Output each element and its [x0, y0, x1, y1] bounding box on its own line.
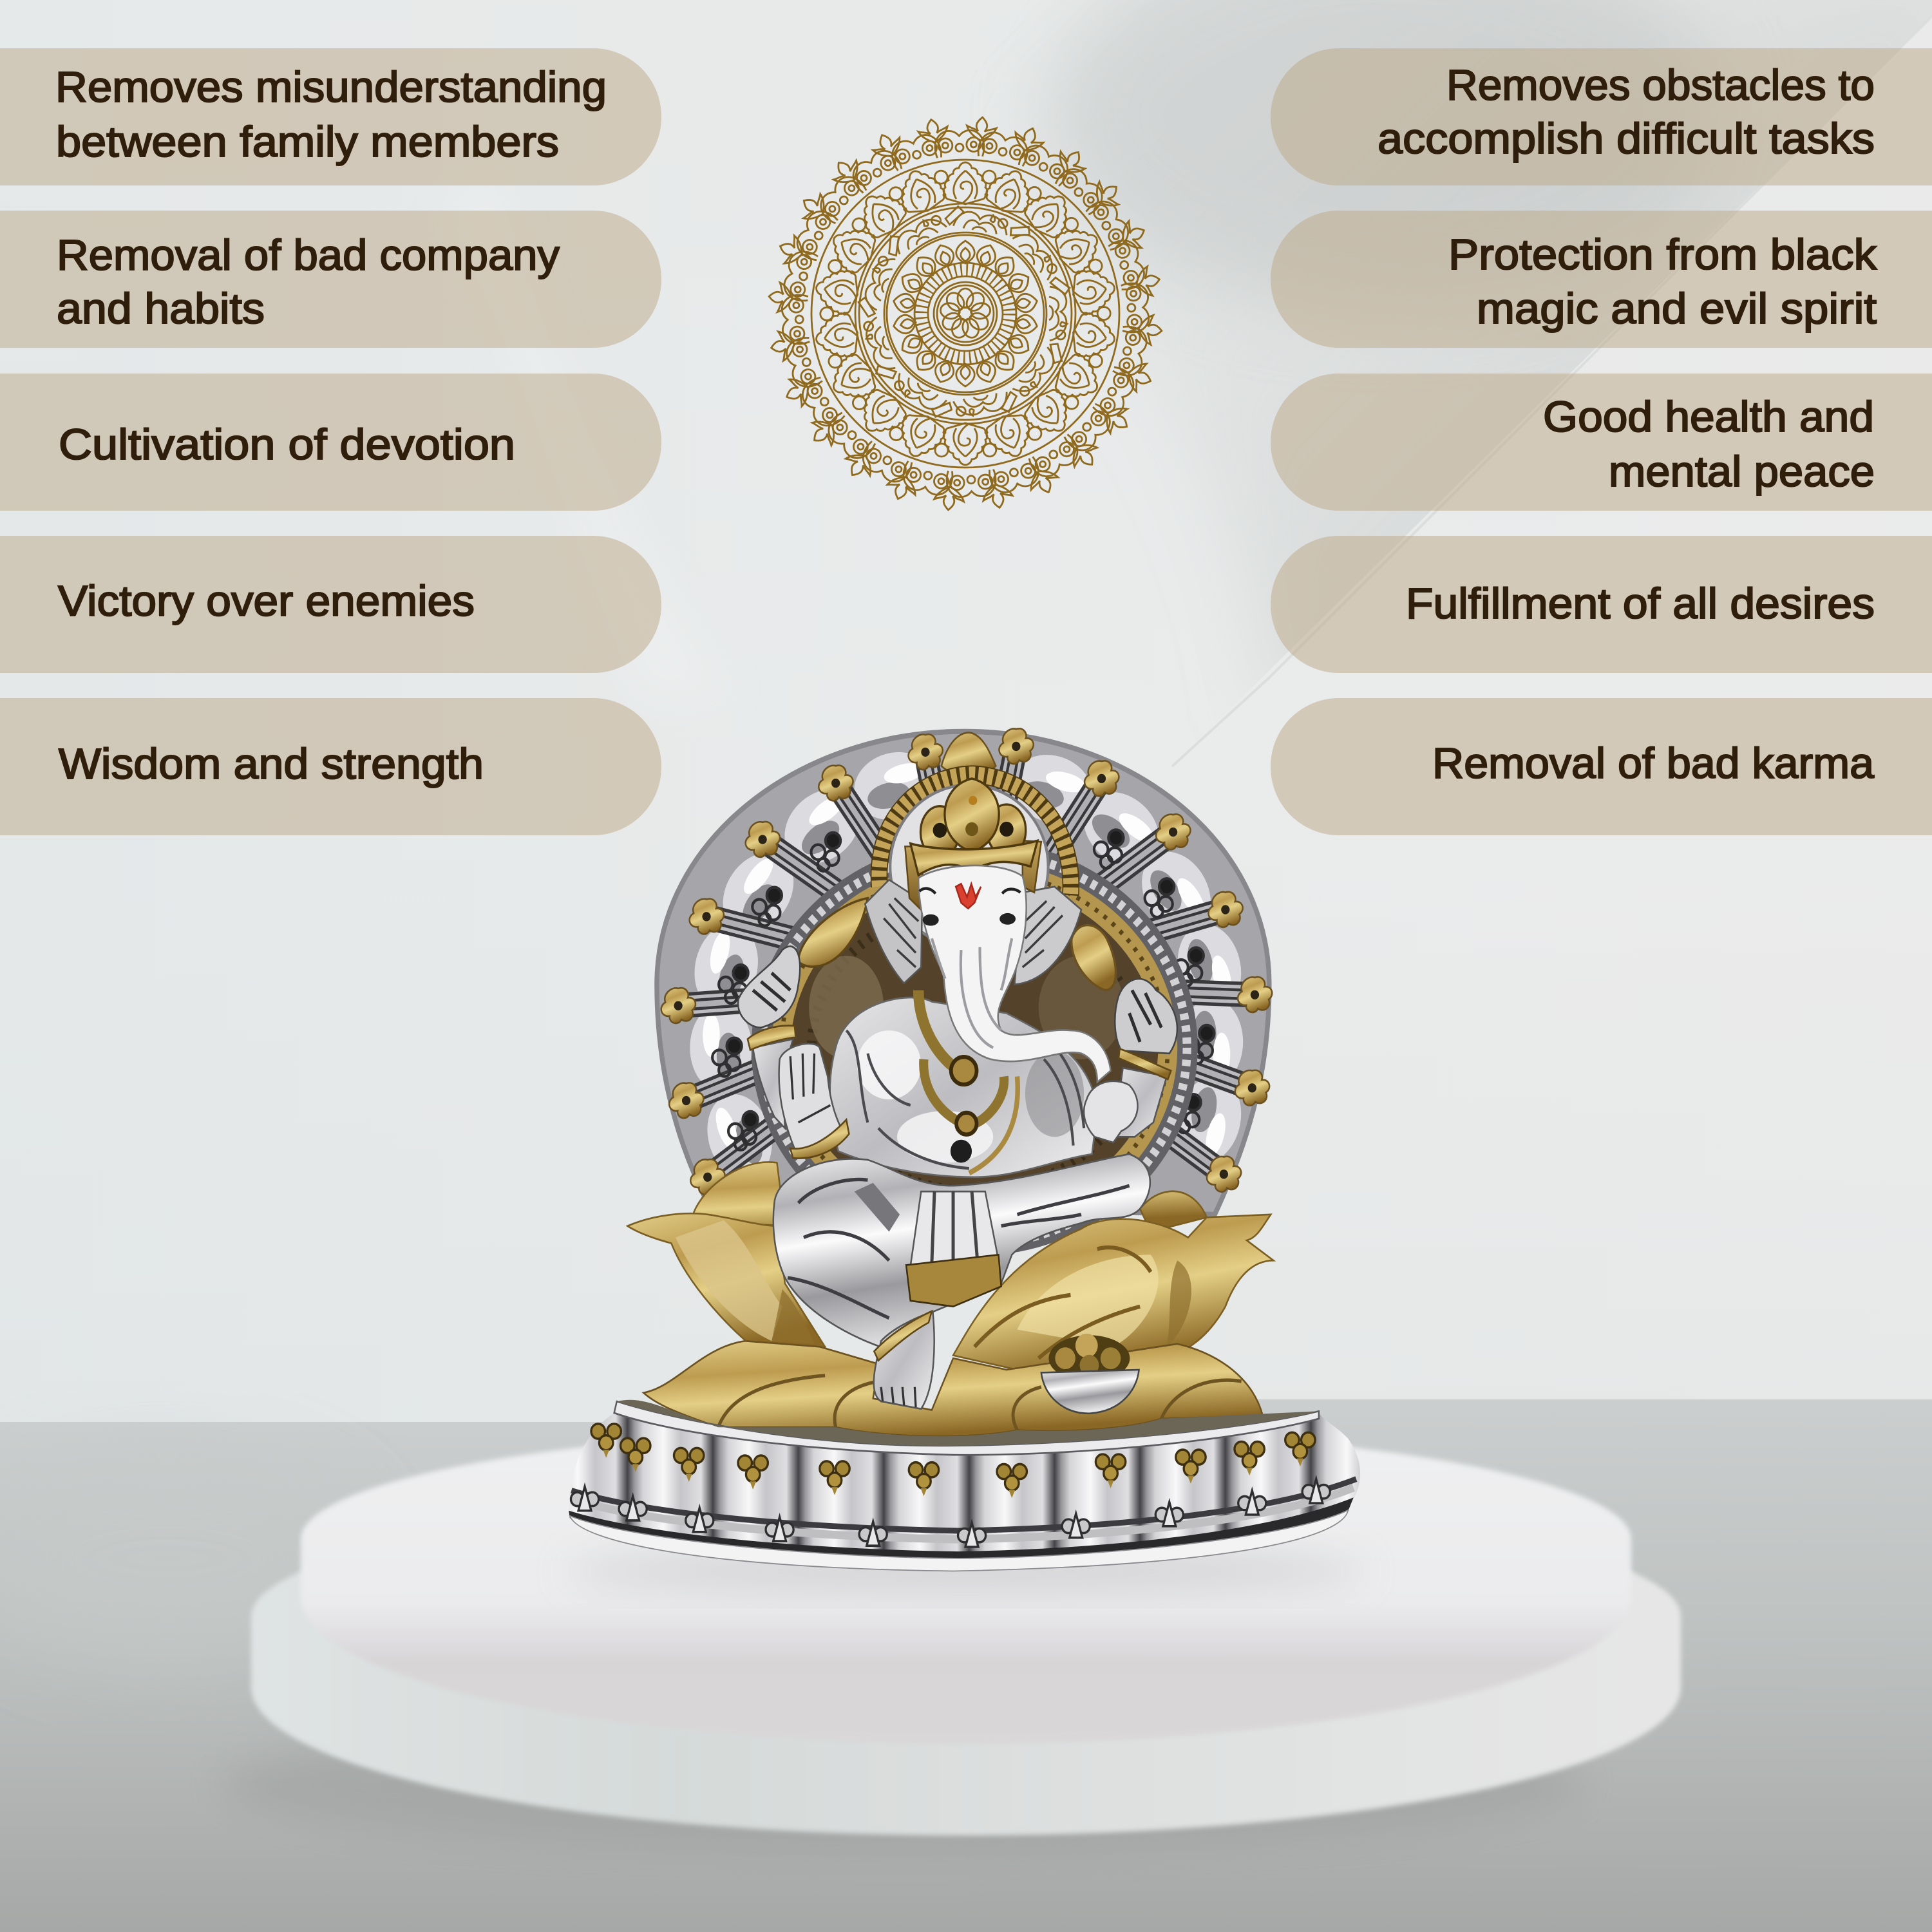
- drape folds: [788, 1179, 1130, 1318]
- drape pleats: [932, 1191, 977, 1264]
- pill: health: Good health and: [1543, 393, 1874, 441]
- right hand: [1084, 1081, 1138, 1142]
- anklet: [874, 1311, 932, 1361]
- pill: obstacles: Removes obstacles to: [1446, 61, 1875, 109]
- tilak: [956, 884, 981, 909]
- pill: black magic: [1271, 211, 1932, 348]
- icon: gold mandala: [768, 116, 1163, 511]
- palm fingers: [790, 1054, 830, 1122]
- lower disc: [251, 1494, 1681, 1835]
- pill: karma: Removal of bad karma: [1432, 739, 1875, 788]
- gold fringe: [906, 1255, 1001, 1307]
- sweet bowl: [1041, 1334, 1139, 1414]
- left lotus: [627, 1213, 825, 1356]
- rear right hand: [1115, 979, 1177, 1054]
- halo silver tiles: [686, 744, 1250, 1189]
- pill: bad company: [0, 211, 661, 348]
- right lotus: [953, 1215, 1273, 1370]
- torso: [830, 998, 1097, 1177]
- head halo: [890, 785, 1048, 948]
- rear left forearm: [753, 1039, 793, 1128]
- pill: victory: [0, 536, 661, 673]
- gold wrist left: [790, 1119, 849, 1159]
- lotus highlights: [676, 1220, 1191, 1358]
- pill: black magic: Protection from black: [1448, 231, 1877, 279]
- pill: karma: [1271, 698, 1932, 835]
- pedestal: [219, 1426, 1681, 1848]
- base plate top: [617, 1400, 1319, 1446]
- ear shading: [884, 898, 1063, 967]
- right ear: [1014, 887, 1081, 985]
- pill: bad company: and habits: [57, 285, 265, 333]
- pill: victory: Victory over enemies: [58, 577, 475, 625]
- finial on halo: [942, 733, 996, 775]
- pill: devotion: Cultivation of devotion: [59, 421, 515, 469]
- pill: obstacles: [1271, 48, 1932, 185]
- pill: devotion: [0, 374, 661, 511]
- lower petal folds: [718, 1376, 1242, 1430]
- halo radial stripes: [678, 746, 1255, 1177]
- pill: wisdom: Wisdom and strength: [59, 740, 484, 788]
- rope ring around head: [879, 775, 1071, 895]
- pill: health: [1271, 374, 1932, 511]
- pill: black magic: magic and evil spirit: [1477, 285, 1877, 333]
- pill: wisdom: [0, 698, 661, 835]
- pill: bad company: Removal of bad company: [57, 231, 560, 279]
- halo ornaments: [712, 829, 1214, 1150]
- background wall: [1043, 0, 1932, 767]
- bracelets: [748, 1026, 1171, 1079]
- back lotus petals: [692, 1162, 1207, 1232]
- pills: left column: [0, 48, 661, 835]
- head and trunk: [918, 866, 1111, 1082]
- legs and drape: [773, 1154, 1150, 1350]
- dark lower band: [569, 1497, 1354, 1560]
- drape center panel: [911, 1191, 999, 1266]
- statue: silver and gold Ganesha: [569, 728, 1360, 1571]
- base drum: [569, 1400, 1360, 1571]
- base top rim: [614, 1401, 1319, 1455]
- pill: desires: [1271, 536, 1932, 673]
- halo backing: [657, 732, 1269, 1215]
- eyes and brows: [920, 889, 1020, 926]
- left ear: [865, 880, 922, 983]
- upper disc: [301, 1426, 1631, 1744]
- crown side hair: [905, 840, 1041, 910]
- gold goad: [1072, 925, 1116, 990]
- halo gold flowers: [661, 728, 1272, 1195]
- floor shadow: [219, 1719, 1584, 1848]
- statue contact shadow: [567, 1551, 1365, 1592]
- rear right fingers: [1130, 990, 1161, 1042]
- floor: [0, 1399, 1932, 1932]
- pill: obstacles: accomplish difficult tasks: [1378, 115, 1875, 163]
- torso highlights and folds: [846, 1030, 1084, 1173]
- crown gems: [933, 796, 1014, 838]
- base silver knots: [571, 1486, 599, 1511]
- pill: health: mental peace: [1609, 448, 1875, 496]
- left raised palm: [779, 1044, 846, 1151]
- toes on thigh: [855, 1183, 900, 1232]
- white foot of base: [570, 1510, 1349, 1571]
- toes: [881, 1387, 916, 1407]
- pill: desires: Fulfillment of all desires: [1406, 580, 1875, 628]
- necklace: [918, 990, 1004, 1135]
- trunk shading: [932, 938, 1012, 1048]
- pill: removes misunderstanding: [0, 48, 661, 185]
- pill: removes misunderstanding: between family members: [56, 118, 559, 166]
- base gold trefoils: [591, 1424, 621, 1458]
- scalloped rail: [571, 1479, 1356, 1531]
- gold axe: [799, 898, 867, 967]
- foot: [874, 1312, 934, 1409]
- rear right forearm: [1113, 1068, 1167, 1137]
- pill: removes misunderstanding: Removes misunderstanding: [55, 63, 607, 111]
- rear left fingers: [753, 973, 790, 1010]
- pills: right column: [1271, 48, 1932, 835]
- rail highlight: [571, 1488, 1354, 1539]
- crown: [911, 779, 1037, 875]
- lower lotus petals: [643, 1341, 1263, 1436]
- rear left hand: [738, 946, 800, 1028]
- niche and gold band: [762, 851, 1187, 1244]
